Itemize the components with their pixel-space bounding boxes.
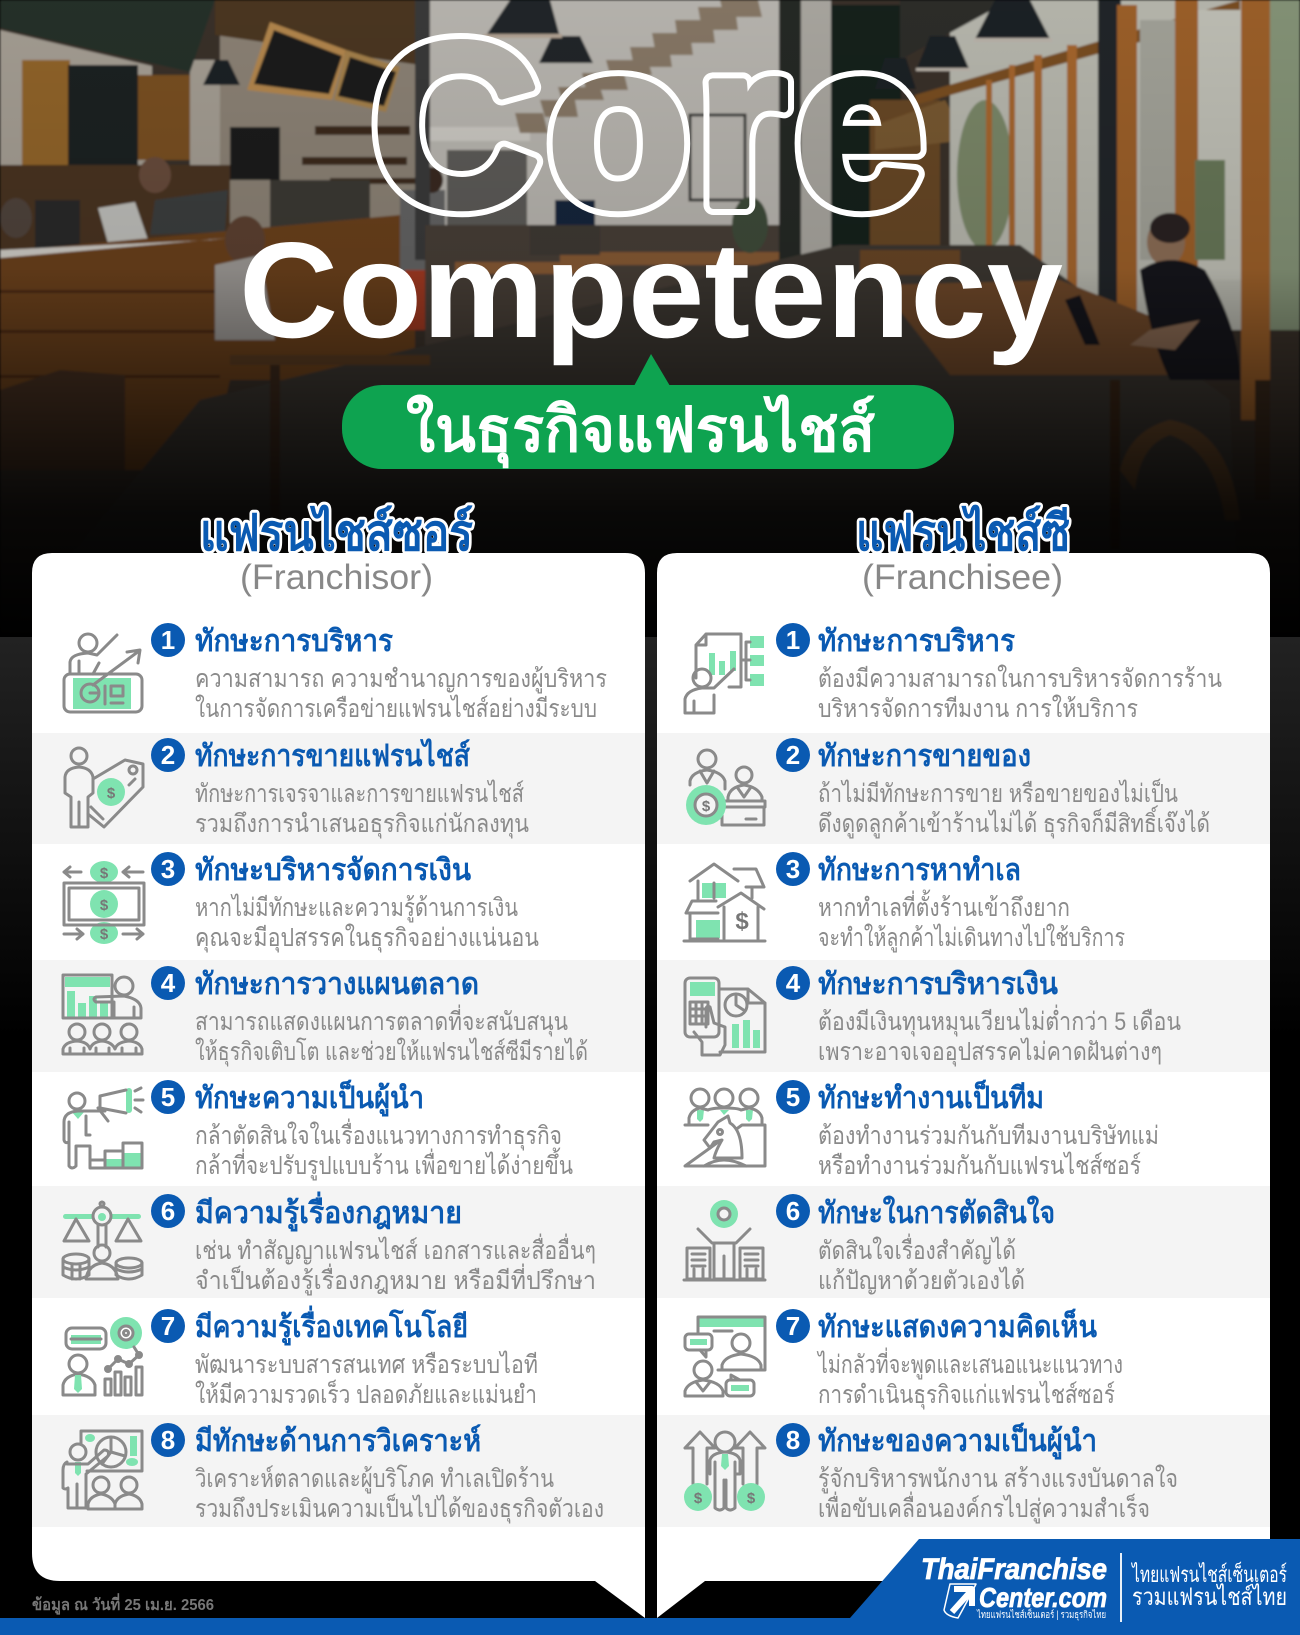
description <box>818 778 1210 839</box>
number 5: 5 <box>786 1082 800 1112</box>
franchisee item 4 <box>657 960 1270 1072</box>
number 5 <box>776 1080 810 1114</box>
row band <box>657 1186 1270 1298</box>
franchisee item 1 <box>685 623 1222 723</box>
description <box>195 1118 573 1181</box>
subtitle pill: in franchise business: ในธุรกิจแฟรนไชส์ <box>406 394 875 468</box>
number 2 <box>776 738 810 772</box>
logo arrow <box>944 1584 976 1618</box>
icon: person with price tag: $ <box>107 785 116 802</box>
row band <box>32 733 645 844</box>
number 3 <box>151 852 185 886</box>
title: ทักษะแสดงความคิดเห็น <box>818 1308 1097 1344</box>
description <box>195 779 529 839</box>
number 1 <box>776 623 810 657</box>
icon: presenter with phone <box>64 634 142 712</box>
title: ทักษะการวางแผนตลาด <box>195 968 479 1001</box>
number 2 <box>151 738 185 772</box>
description: รู้จักบริหารพนักงาน สร้างแรงบันดาลใจ <box>818 1464 1178 1494</box>
title: ทักษะบริหารจัดการเงิน <box>195 854 471 887</box>
description <box>195 1233 596 1296</box>
icon: decision maker with buildings <box>684 1200 765 1280</box>
description: ต้องมีความสามารถในการบริหารจัดการร้าน <box>818 664 1222 693</box>
description: ในการจัดการเครือข่ายแฟรนไชส์อย่างมีระบบ <box>195 694 597 723</box>
number 5 <box>151 1080 185 1114</box>
row band <box>32 1415 645 1527</box>
number 7 <box>151 1309 185 1343</box>
franchisor item 4 <box>32 960 645 1072</box>
title: มีความรู้เรื่องกฎหมาย <box>195 1191 462 1232</box>
number 7: 7 <box>786 1311 800 1341</box>
number 6 <box>776 1194 810 1228</box>
franchisor item 7 <box>63 1305 538 1409</box>
number 8: 8 <box>161 1425 175 1455</box>
franchisee item 6 <box>657 1186 1270 1298</box>
icon: leader with megaphone <box>64 1088 143 1168</box>
description: รวมถึงการนำเสนอธุรกิจแก่นักลงทุน <box>195 810 529 839</box>
logo wordmark line 2: Center.com <box>979 1582 1107 1613</box>
background: cafe interior photo <box>0 0 1300 640</box>
icon: analysis presentation <box>63 1431 142 1509</box>
number 8 <box>151 1423 185 1457</box>
title: ทักษะการบริหาร <box>195 625 393 658</box>
description: ให้มีความรวดเร็ว ปลอดภัยและแม่นยำ <box>195 1379 537 1409</box>
icon: houses: $ <box>735 908 749 935</box>
title: ทักษะของความเป็นผู้นำ <box>818 1422 1097 1460</box>
row band <box>657 960 1270 1072</box>
icon: houses <box>684 864 765 941</box>
description: ต้องทำงานร่วมกันกับทีมงานบริษัทแม่ <box>818 1122 1159 1150</box>
number 6: 6 <box>786 1196 800 1226</box>
icon: leader with growth arrows <box>684 1432 765 1511</box>
description <box>818 1004 1181 1067</box>
number 7: 7 <box>161 1311 175 1341</box>
franchisor item 1 <box>64 623 607 723</box>
logo tagline: ไทยแฟรนไชส์เซ็นเตอร์ | รวมธุรกิจไทย <box>976 1607 1106 1621</box>
title: ทักษะการขายของ <box>818 740 1031 773</box>
logo wordmark line 1: ThaiFranchise <box>921 1553 1107 1586</box>
source date note: ข้อมูล ณ วันที่ 25 เม.ย. 2566 <box>32 1593 214 1616</box>
description: หากทำเลที่ตั้งร้านเข้าถึงยาก <box>818 889 1070 922</box>
description: สามารถแสดงแผนการตลาดที่จะสนับสนุน <box>195 1004 568 1037</box>
icon: leader with growth arrows: $ <box>694 1490 703 1507</box>
description <box>195 665 607 723</box>
description: คุณจะมีอุปสรรคในธุรกิจอย่างแน่นอน <box>195 923 539 953</box>
number 3: 3 <box>161 854 175 884</box>
logo divider <box>1120 1553 1122 1622</box>
lower background gradient <box>0 637 1300 1037</box>
description: การดำเนินธุรกิจแก่แฟรนไชส์ซอร์ <box>818 1380 1115 1410</box>
icon: seller and customer: $ <box>702 798 711 815</box>
franchisor item 8 <box>32 1415 645 1527</box>
heading: franchisee: แฟรนไชส์ซี <box>856 504 1070 561</box>
number 1: 1 <box>161 625 175 655</box>
description: แก้ปัญหาด้วยตัวเองได้ <box>818 1266 1025 1295</box>
title: ทักษะทำงานเป็นทีม <box>818 1079 1044 1115</box>
description: วิเคราะห์ตลาดและผู้บริโภค ทำเลเปิดร้าน <box>195 1464 554 1494</box>
number 7 <box>776 1309 810 1343</box>
icon: banknotes: $ <box>100 897 109 914</box>
title: ทักษะการหาทำเล <box>818 854 1021 887</box>
title: มีความรู้เรื่องเทคโนโลยี <box>195 1305 468 1346</box>
icon: report and chart <box>685 634 764 713</box>
icon: technology <box>63 1317 142 1395</box>
title: ทักษะในการตัดสินใจ <box>818 1195 1055 1230</box>
description <box>818 889 1125 953</box>
description: ถ้าไม่มีทักษะการขาย หรือขายของไม่เป็น <box>818 778 1178 808</box>
description <box>195 893 539 953</box>
title: มีทักษะด้านการวิเคราะห์ <box>195 1424 481 1458</box>
title: ทักษะการขายแฟรนไชส์ <box>195 738 471 773</box>
franchisor item 6 <box>32 1186 645 1298</box>
franchisee subheading: (Franchisee) <box>862 558 1063 597</box>
description: จำเป็นต้องรู้เรื่องกฎหมาย หรือมีที่ปรึกษา <box>195 1263 596 1296</box>
icon: calculator and report <box>685 978 765 1055</box>
icon: presenter with audience <box>63 975 142 1054</box>
franchisor item 5 <box>64 1079 573 1181</box>
franchisee item 8 <box>657 1415 1270 1527</box>
title: Core (outlined): Core <box>372 0 933 255</box>
number 4: 4 <box>161 968 176 998</box>
row band <box>657 1415 1270 1527</box>
description: ดึงดูดลูกค้าเข้าร้านไม่ได้ ธุรกิจก็มีสิทธิ์เจ๊งได้ <box>818 805 1210 839</box>
description: เช่น ทำสัญญาแฟรนไชส์ เอกสารและสื่ออื่นๆ <box>195 1233 596 1265</box>
description <box>818 1122 1159 1180</box>
number 3: 3 <box>786 854 800 884</box>
footer band <box>0 1618 1300 1635</box>
number 6: 6 <box>161 1196 175 1226</box>
description: เพราะอาจเจออุปสรรคไม่คาดฝันต่างๆ <box>818 1037 1162 1067</box>
number 5: 5 <box>161 1082 175 1112</box>
row band <box>32 960 645 1072</box>
icon: discussion <box>685 1317 765 1396</box>
description: ให้ธุรกิจเติบโต และช่วยให้แฟรนไชส์ซีมีรายได้ <box>195 1037 588 1067</box>
description: ทักษะการเจรจาและการขายแฟรนไชส์ <box>195 779 524 808</box>
description: จะทำให้ลูกค้าไม่เดินทางไปใช้บริการ <box>818 923 1125 953</box>
description: หากไม่มีทักษะและความรู้ด้านการเงิน <box>195 893 518 923</box>
title: Competency: Competency <box>239 214 1063 366</box>
number 4 <box>151 966 185 1000</box>
franchisee item 7 <box>685 1308 1123 1410</box>
description <box>816 1347 1123 1410</box>
icon: person with price tag <box>65 748 143 827</box>
description: รวมถึงประเมินความเป็นไปได้ของธุรกิจตัวเอง <box>195 1493 604 1524</box>
icon: banknotes: $ <box>100 865 109 882</box>
description: กล้าที่จะปรับรูปแบบร้าน เพื่อขายได้ง่ายขึ้น <box>195 1147 573 1181</box>
title: ทักษะความเป็นผู้นำ <box>195 1079 424 1117</box>
franchisee item 5 <box>685 1079 1159 1180</box>
franchisee item 2 <box>657 733 1270 844</box>
number 8 <box>776 1423 810 1457</box>
description <box>195 1464 604 1524</box>
number 6 <box>151 1194 185 1228</box>
icon: scales and coins <box>63 1202 142 1279</box>
number 2: 2 <box>786 740 800 770</box>
number 2: 2 <box>161 740 175 770</box>
description: ไม่กลัวที่จะพูดและเสนอแนะแนวทาง <box>816 1347 1123 1380</box>
title: ทักษะการบริหารเงิน <box>818 968 1058 1001</box>
icon: banknotes: $ <box>100 926 109 943</box>
description <box>195 1004 588 1067</box>
photo darkening gradient <box>0 0 1300 640</box>
description <box>818 1233 1025 1295</box>
row band <box>657 733 1270 844</box>
icon: team with chess knight <box>685 1089 765 1166</box>
logo block: ThaiFranchise Center <box>850 1539 1300 1622</box>
description: บริหารจัดการทีมงาน การให้บริการ <box>818 694 1138 723</box>
heading: franchisor: แฟรนไชส์ซอร์ <box>200 504 473 561</box>
description: ต้องมีเงินทุนหมุนเวียนไม่ต่ำกว่า 5 เดือน <box>818 1004 1181 1037</box>
row band <box>32 1186 645 1298</box>
description: ตัดสินใจเรื่องสำคัญได้ <box>818 1233 1016 1265</box>
icon: seller and customer <box>686 750 765 825</box>
description: เพื่อขับเคลื่อนองค์กรไปสู่ความสำเร็จ <box>818 1491 1150 1524</box>
franchisor item 3 <box>64 852 539 953</box>
description <box>818 664 1222 723</box>
franchisor subheading: (Franchisor) <box>240 558 433 597</box>
description: ความสามารถ ความชำนาญการของผู้บริหาร <box>195 665 607 694</box>
number 1 <box>151 623 185 657</box>
number 4: 4 <box>786 968 801 998</box>
franchisor item 2 <box>32 733 645 844</box>
description: กล้าตัดสินใจในเรื่องแนวทางการทำธุรกิจ <box>195 1118 562 1151</box>
icon: leader with growth arrows: $ <box>747 1490 756 1507</box>
title: ทักษะการบริหาร <box>818 625 1015 658</box>
description: พัฒนาระบบสารสนเทศ หรือระบบไอที <box>195 1350 538 1379</box>
description <box>195 1350 538 1409</box>
description <box>818 1464 1178 1524</box>
number 4 <box>776 966 810 1000</box>
description: หรือทำงานร่วมกันกับแฟรนไชส์ซอร์ <box>818 1151 1141 1180</box>
number 8: 8 <box>786 1425 800 1455</box>
icon: banknotes <box>64 861 144 944</box>
number 1: 1 <box>786 625 800 655</box>
number 3 <box>776 852 810 886</box>
franchisee item 3 <box>684 852 1125 953</box>
subtitle pill: in franchise business <box>342 354 954 469</box>
